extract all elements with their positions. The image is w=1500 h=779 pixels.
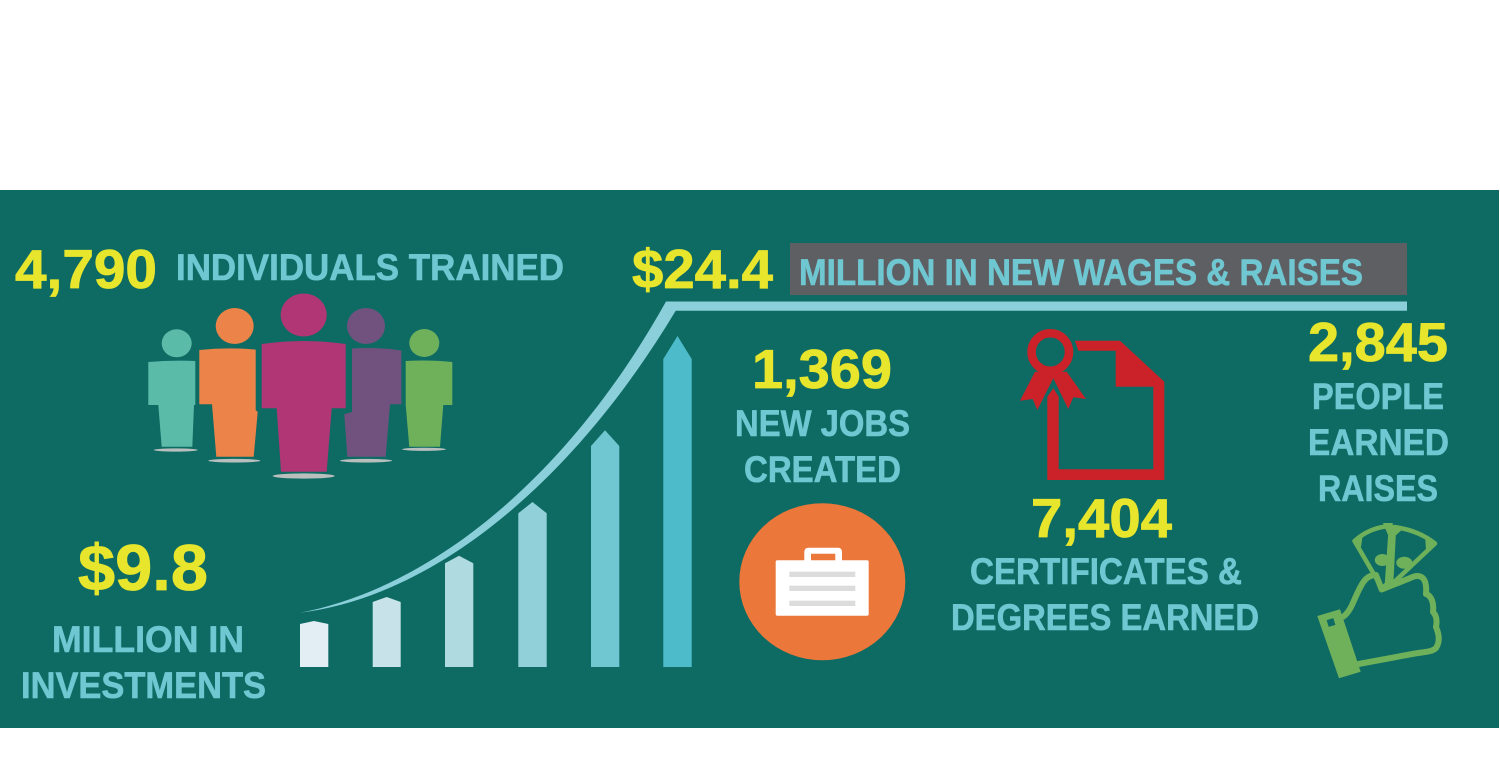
bar chart: rising arrows xyxy=(300,336,692,667)
stat: new jobs: 1,369 xyxy=(752,338,892,400)
bar 4 xyxy=(518,502,547,667)
stat: people earned raises: RAISES xyxy=(1318,468,1438,509)
stat: people earned raises: PEOPLE xyxy=(1312,376,1444,417)
stat: investments: INVESTMENTS xyxy=(21,665,266,706)
stat: wages and raises: $24.4 xyxy=(632,238,773,300)
bar 6 xyxy=(663,336,692,667)
bar 2 xyxy=(373,597,401,667)
stat: people earned raises: 2,845 xyxy=(1308,311,1448,373)
person: orange xyxy=(199,308,260,463)
stat: certificates and degrees xyxy=(951,487,1259,638)
icon: briefcase xyxy=(739,503,905,660)
icon: certificate with ribbon xyxy=(1020,333,1164,480)
growth curve line xyxy=(300,302,1407,613)
stat: investments xyxy=(21,531,266,706)
stat: wages and raises: MILLION IN NEW WAGES & RAISES xyxy=(799,252,1363,293)
bar 3 xyxy=(445,556,473,667)
person: green xyxy=(402,329,452,451)
stat: investments: $9.8 xyxy=(78,531,208,604)
icon: hand holding money xyxy=(1317,523,1439,678)
stat: people earned raises xyxy=(1308,311,1449,509)
bar 1 xyxy=(300,621,328,667)
stat: individuals trained xyxy=(15,238,564,300)
stat: investments: MILLION IN xyxy=(52,619,244,660)
stat: individuals trained: INDIVIDUALS TRAINED xyxy=(176,247,564,288)
stat: people earned raises: EARNED xyxy=(1308,422,1449,463)
stat: new jobs: CREATED xyxy=(744,449,901,490)
bar 5 xyxy=(591,430,619,667)
icon: group of people xyxy=(148,294,452,479)
stat: wages and raises xyxy=(632,238,1407,300)
person: magenta xyxy=(262,294,346,479)
stat: individuals trained: 4,790 xyxy=(15,238,157,300)
stat: certificates and degrees: DEGREES EARNED xyxy=(951,597,1259,638)
stat: certificates and degrees: CERTIFICATES & xyxy=(970,551,1242,592)
stat: new jobs xyxy=(735,338,910,490)
person: teal xyxy=(148,329,198,452)
teal background panel xyxy=(0,190,1499,728)
person: purple xyxy=(340,308,401,463)
stat: new jobs: NEW JOBS xyxy=(735,403,910,444)
stat: certificates and degrees: 7,404 xyxy=(1031,487,1172,549)
